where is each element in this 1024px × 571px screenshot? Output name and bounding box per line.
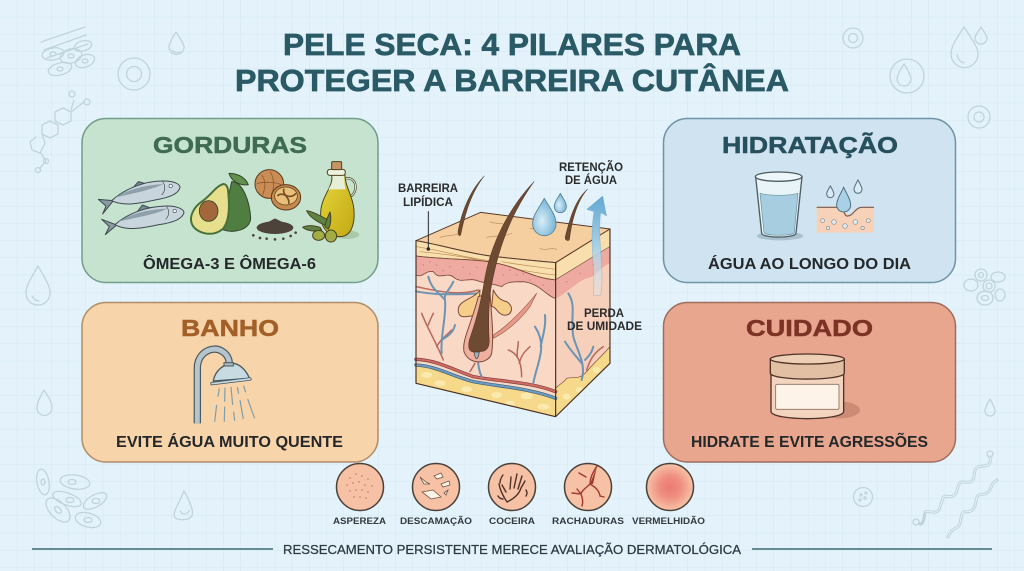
heading: hidratacao: HIDRATAÇÃO <box>722 131 898 158</box>
icon: olive oil bottle <box>303 162 359 242</box>
symptom: aspereza <box>333 464 386 527</box>
footer note: RESSECAMENTO PERSISTENTE MERECE AVALIAÇÃO DERMATOLÓGICA <box>283 542 741 557</box>
label: banho: EVITE ÁGUA MUITO QUENTE <box>116 434 343 451</box>
heading: cuidado: CUIDADO <box>746 315 873 341</box>
symptom: vermelhidao <box>632 464 705 527</box>
icon: water glass <box>755 172 803 240</box>
symptom: coceira <box>488 464 536 527</box>
title: PELE SECA: 4 PILARES PARA <box>283 27 741 62</box>
heading: gorduras: GORDURAS <box>153 132 307 158</box>
label: agua: ÁGUA AO LONGO DO DIA <box>708 256 911 273</box>
symptom: aspereza: ASPEREZA <box>333 516 386 527</box>
label: cuidado: HIDRATE E EVITE AGRESSÕES <box>691 433 928 451</box>
label: perda de umidade <box>567 308 642 333</box>
skin cross-section diagram <box>398 161 642 417</box>
icon: shower <box>197 349 255 423</box>
title <box>235 27 789 98</box>
symptom: descamacao <box>400 464 472 527</box>
skin block <box>416 176 610 417</box>
label: barreira lipidica <box>398 183 458 209</box>
icon: walnuts and seeds <box>252 170 301 241</box>
label: retencao de agua <box>559 161 623 187</box>
label: perda de umidade: DE UMIDADE <box>567 321 642 333</box>
title: PROTEGER A BARREIRA CUTÂNEA <box>235 62 789 98</box>
heading: banho: BANHO <box>181 315 279 341</box>
symptom: descamacao: DESCAMAÇÃO <box>400 516 472 527</box>
panel: gorduras <box>82 118 378 282</box>
symptom: coceira: COCEIRA <box>489 516 535 527</box>
label: retencao de agua: DE ÁGUA <box>565 174 617 187</box>
icon: hydrated skin <box>817 180 874 233</box>
label: barreira lipidica: LIPÍDICA <box>403 196 453 209</box>
symptom: rachaduras <box>552 464 624 527</box>
squiggle highlight <box>925 457 997 537</box>
panel: banho <box>82 302 378 462</box>
label: omega: ÔMEGA-3 E ÔMEGA-6 <box>143 255 316 273</box>
panel: cuidado <box>664 302 956 462</box>
label: retencao de agua: RETENÇÃO <box>559 161 623 174</box>
icon: cream jar <box>770 354 860 419</box>
icon: fish <box>98 181 184 235</box>
label: barreira lipidica: BARREIRA <box>398 183 458 195</box>
symptom: rachaduras: RACHADURAS <box>552 516 624 527</box>
label: perda de umidade: PERDA <box>584 308 624 320</box>
panel: hidratacao <box>664 118 956 282</box>
symptoms row <box>333 464 705 527</box>
symptom: vermelhidao: VERMELHIDÃO <box>632 516 705 527</box>
icon: avocado <box>191 173 251 234</box>
